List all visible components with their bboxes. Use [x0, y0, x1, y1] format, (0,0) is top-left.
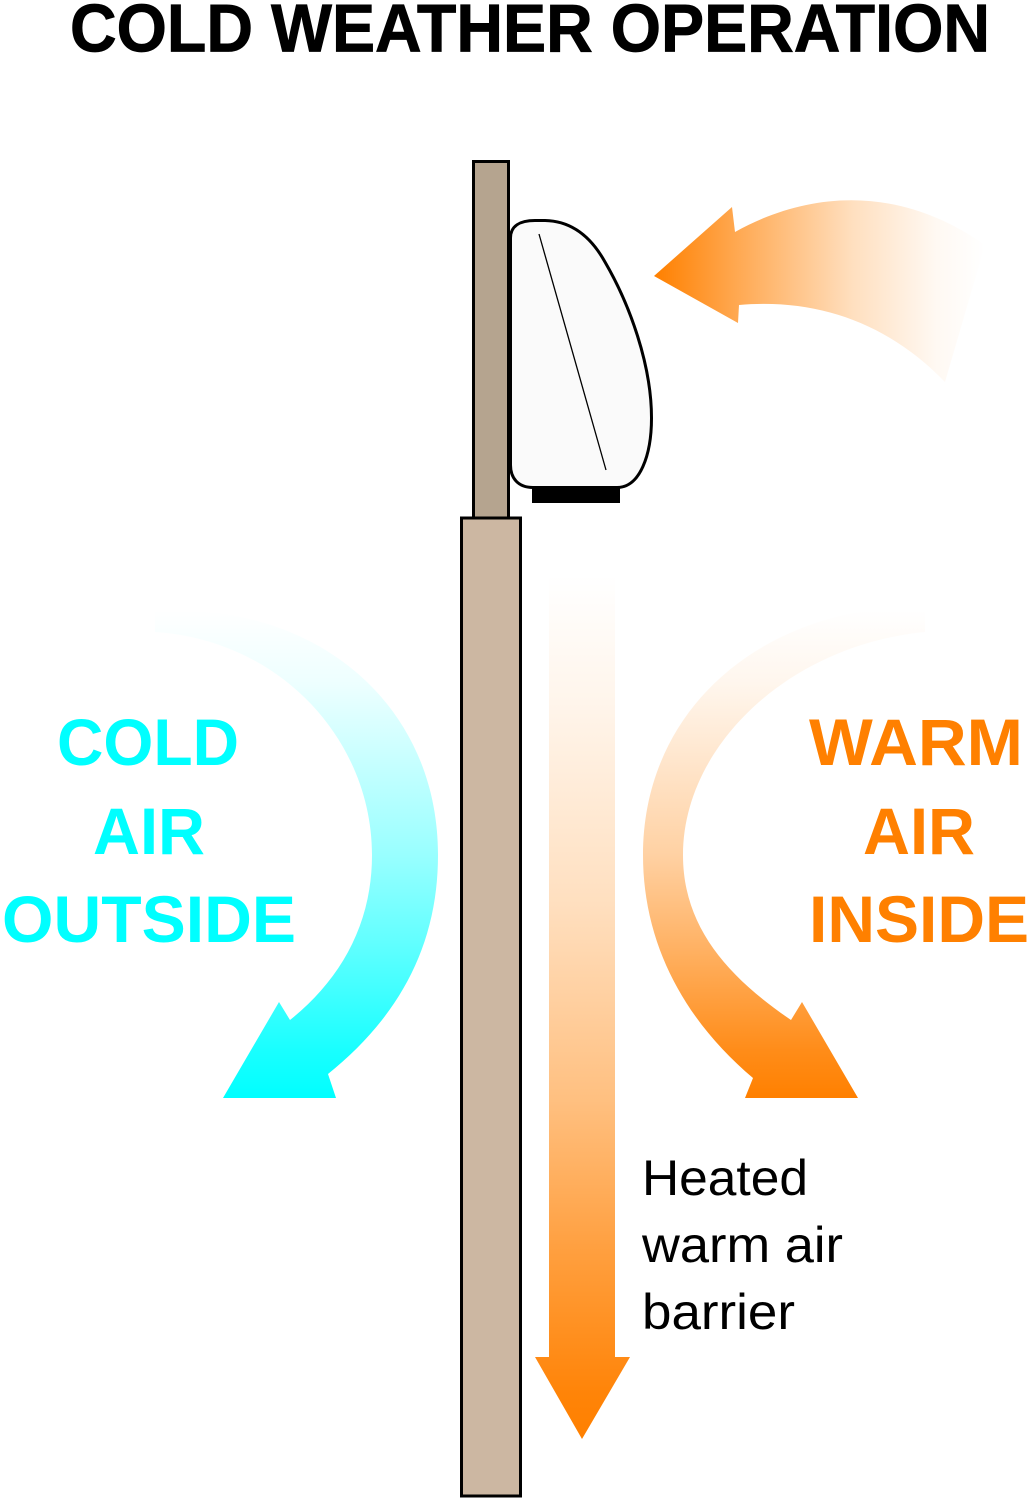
label: cold air outside: OUTSIDE — [2, 882, 296, 956]
arrow: cold air outside — [155, 611, 438, 1098]
air curtain heater unit — [510, 220, 652, 503]
label: warm air inside: INSIDE — [809, 882, 1029, 956]
label: heated warm air barrier — [641, 1150, 843, 1340]
label: heated warm air barrier: barrier — [642, 1284, 795, 1340]
heater nozzle — [532, 484, 620, 503]
label: cold air outside: AIR — [93, 794, 205, 868]
lower wall — [462, 518, 520, 1496]
label: cold air outside — [2, 705, 296, 956]
arrow: warm air inside — [643, 606, 925, 1098]
label: heated warm air barrier: warm air — [641, 1217, 843, 1273]
heater body — [510, 220, 652, 488]
arrow: heated warm air barrier — [535, 575, 630, 1439]
label: heated warm air barrier: Heated — [642, 1150, 808, 1206]
label: warm air inside: AIR — [863, 794, 975, 868]
label: warm air inside — [809, 705, 1029, 956]
label: warm air inside: WARM — [809, 705, 1023, 779]
heater louver line — [539, 234, 606, 470]
arrow: warm air drawn into heater — [654, 200, 985, 382]
label: cold air outside: COLD — [57, 705, 239, 779]
upper wall — [474, 162, 508, 518]
